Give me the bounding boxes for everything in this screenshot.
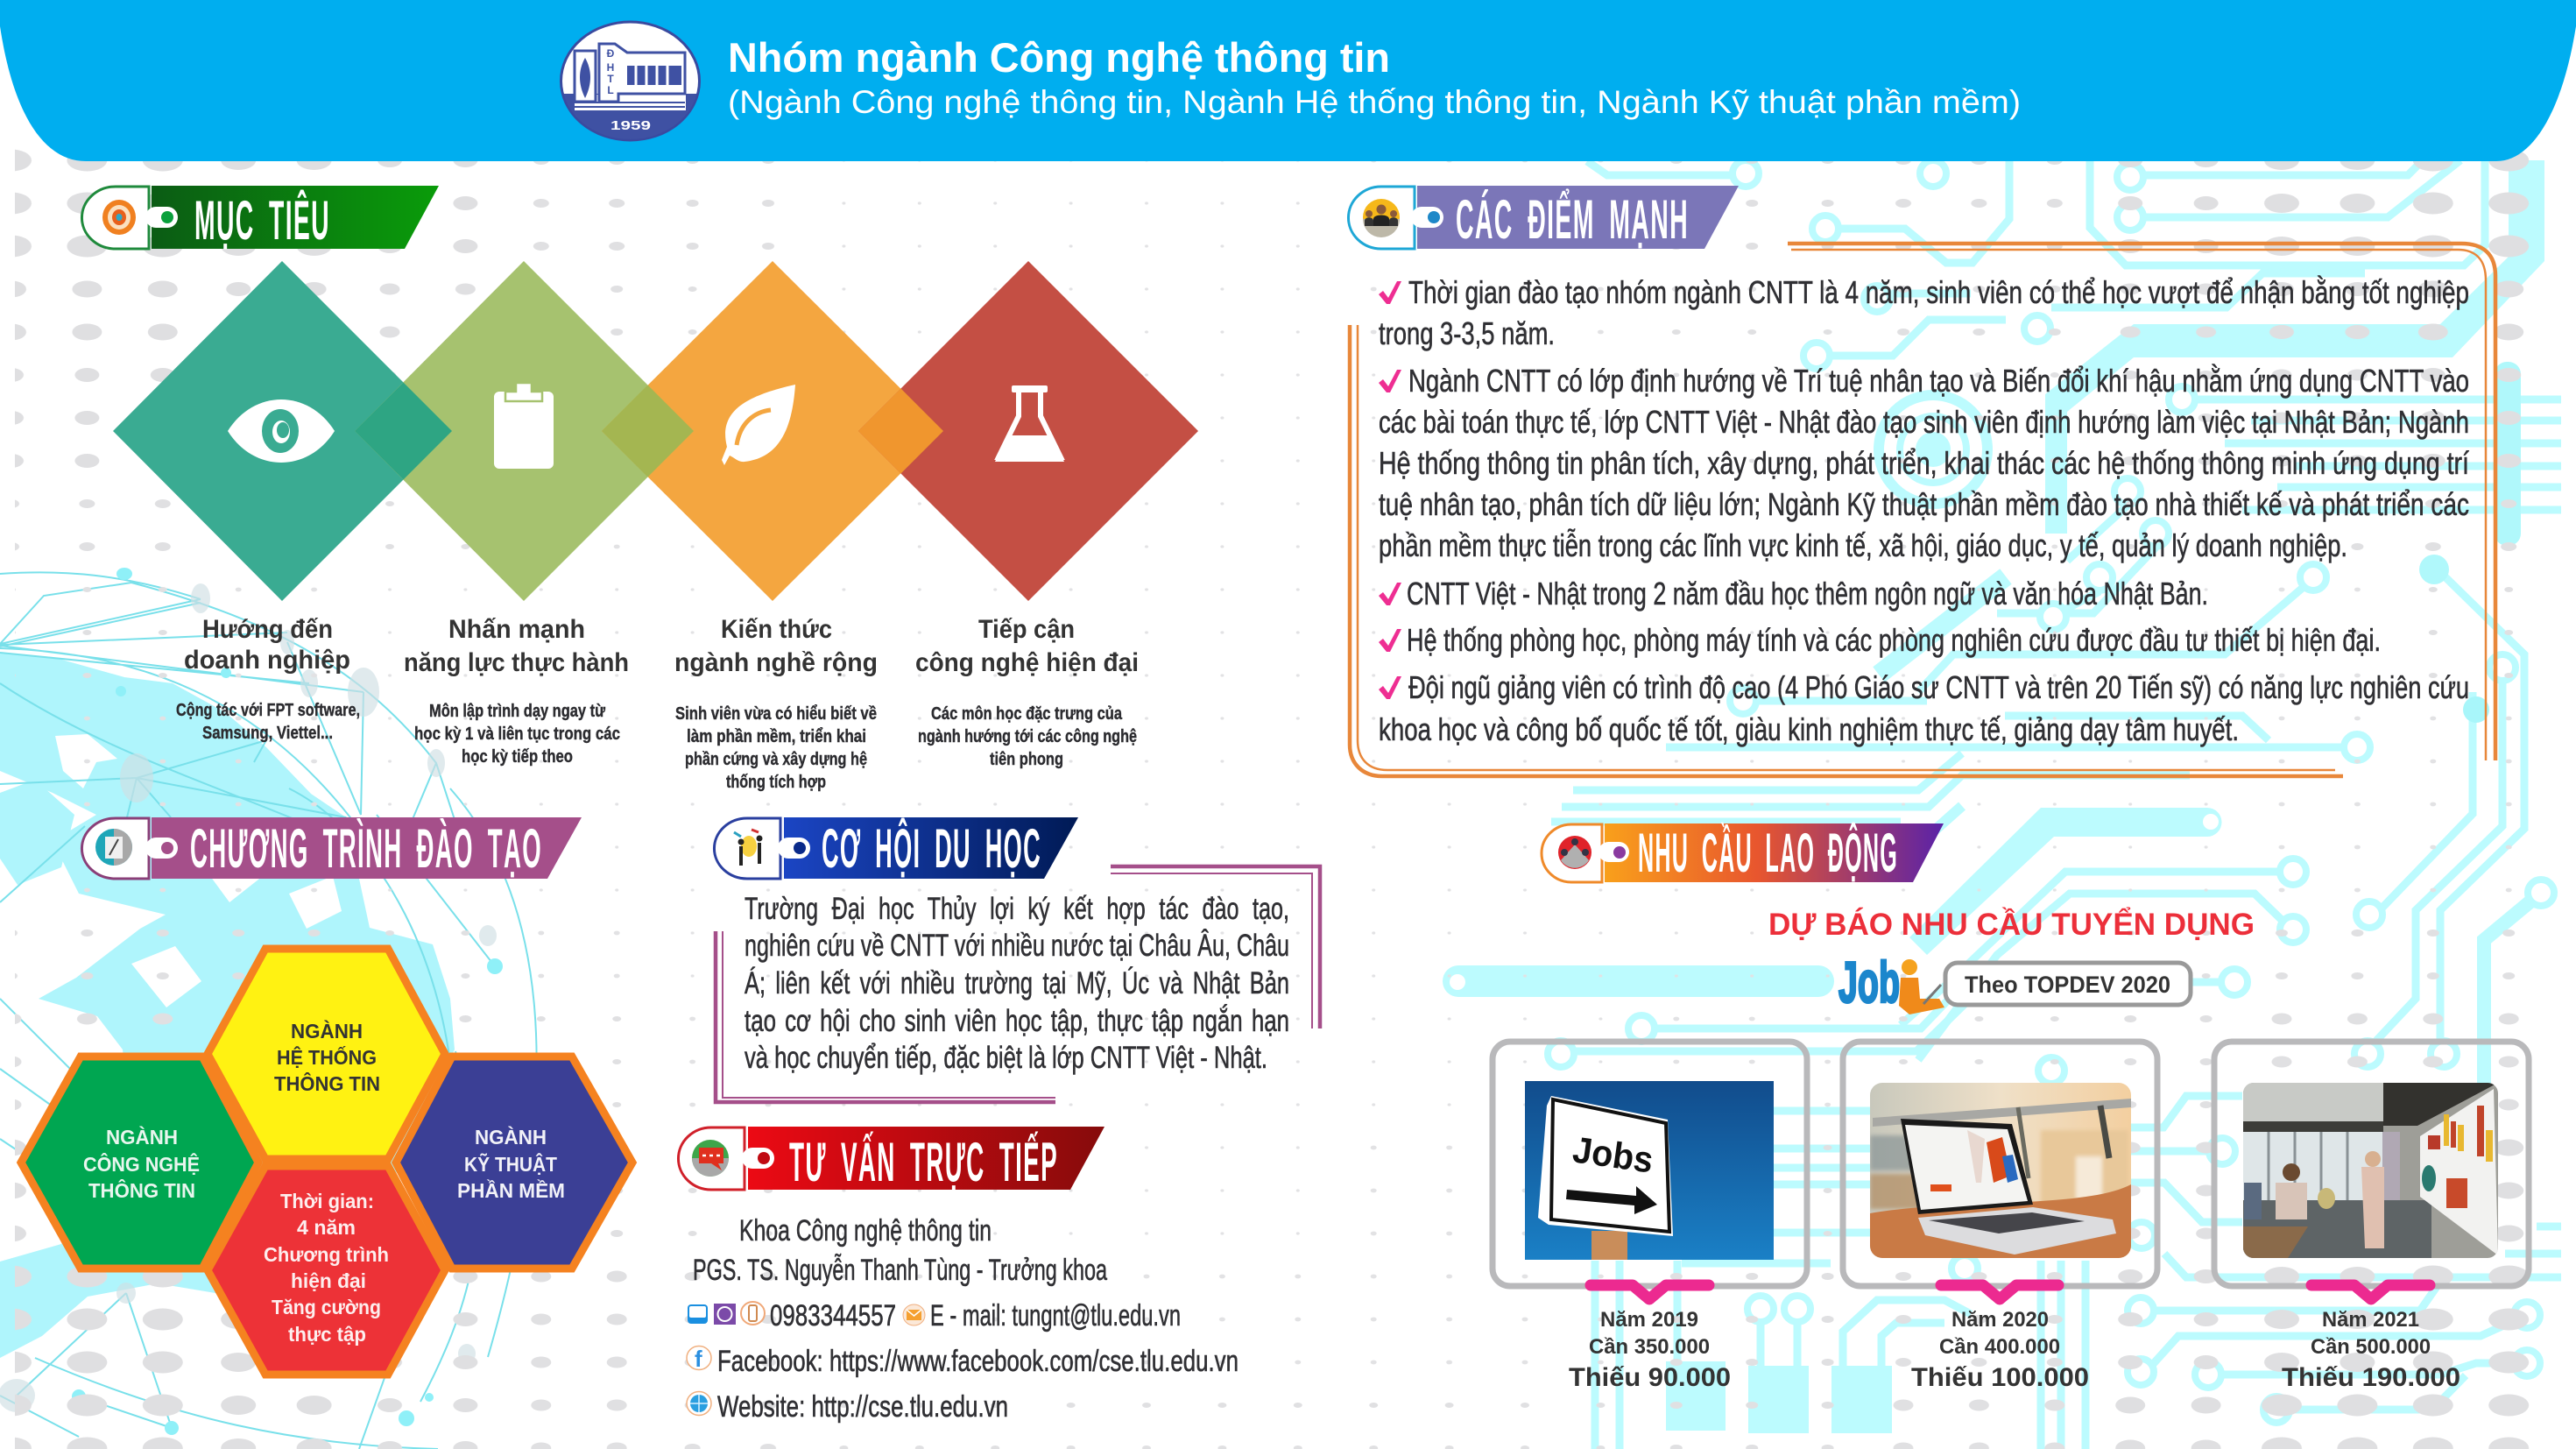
panel: strengths list with frame: CNTT Việt - Nhật trong 2 năm đầu học thêm ngôn ngữ và văn hóa Nhật Bản. [1407,576,2208,611]
hexagon: Nganh Ky thuat phan mem: PHẦN MỀM [457,1178,565,1202]
goal 2 text [404,615,629,767]
check marks [1379,281,1401,699]
heading: Cac diem manh [1348,186,1739,251]
goal 4 text: ngành hướng tới các công nghệ [918,727,1137,746]
hexagon: Nganh Cong nghe thong tin [21,1057,258,1269]
panel: study abroad text with frame: tạo cơ hội cho sinh viên học tập, thực tập ngắn hạn [745,1004,1289,1038]
panel: contact details: Khoa Công nghệ thông tin [739,1214,992,1248]
background: world map with network lines [0,568,537,1449]
panel: contact details: E - mail: tungnt@tlu.edu.vn [930,1299,1181,1332]
panel: study abroad text with frame [716,866,1320,1102]
icon: people and lightbulb [734,830,762,866]
hexagon: duration and curriculum: Tăng cường [272,1296,381,1318]
photo: Jobs sign: Jobs [1570,1128,1655,1181]
callout: 2020 figures: Năm 2020 [1951,1308,2049,1332]
text: NHU CẦU LAO ĐỘNG [1638,822,1898,884]
panel: study abroad text with frame: nghiên cứu về CNTT với nhiều nước tại Châu Âu, Châu [745,929,1289,963]
hexagon: Nganh Cong nghe thong tin: NGÀNH [106,1125,178,1149]
card: year 2021 [2214,1042,2529,1286]
icon: mail [903,1304,925,1325]
diamond row: four goals [113,261,1198,601]
goal 3 text: Kiến thức [721,615,832,644]
icon: team [1363,199,1400,237]
goal 3 text: phần cứng và xây dựng hệ [685,750,867,769]
card: year 2020 [1843,1042,2157,1286]
callout: 2020 figures: Cần 400.000 [1939,1335,2060,1359]
callout: 2019 figures: Năm 2019 [1600,1308,1698,1332]
background: circuit board traces [1443,160,2561,1449]
callout: 2020 figures [1911,1285,2089,1392]
icon: eye [228,399,335,463]
chart heading: recruitment forecast: DỰ BÁO NHU CẦU TUYỂN DỤNG [1768,907,2255,942]
heading: Tu van truc tiep: TƯ VẤN TRỰC TIẾP [789,1131,1058,1193]
goal 3 text: làm phần mềm, triển khai [687,727,866,746]
hexagon: duration and curriculum: thực tập [288,1323,366,1346]
panel: contact details: 0983344557 [770,1299,896,1332]
icon: leaf [722,385,795,465]
goal 4 text: Tiếp cận [978,615,1075,644]
logo: Thuy Loi University: L [607,84,614,96]
panel: study abroad text with frame: và học chuyển tiếp, đặc biệt là lớp CNTT Việt - Nhật. [745,1041,1267,1075]
photo: office presentation [2243,1083,2498,1258]
icon: workers [1558,836,1591,869]
goal 1 text: Samsung, Viettel... [202,724,333,743]
heading: Cac diem manh: CÁC ĐIỂM MẠNH [1456,188,1689,251]
icon: document [95,829,132,866]
icon: flask [995,385,1064,462]
icon: viber [714,1304,736,1325]
callout: 2021 figures: Năm 2021 [2322,1308,2419,1332]
photo: laptop [1870,1083,2131,1258]
callout: 2021 figures: Thiếu 190.000 [2282,1363,2460,1392]
panel: strengths list with frame: trong 3-3,5 năm. [1379,315,1555,351]
panel: study abroad text with frame: Trường Đại học Thủy lợi ký kết hợp tác đào tạo, [745,892,1289,926]
goal 2 text: học kỳ 1 và liên tục trong các [414,724,620,744]
hexagon: Nganh He thong thong tin [208,949,445,1159]
icon: clipboard [494,383,554,469]
goal 2 text: Môn lập trình dạy ngay từ [429,702,605,721]
heading: Co hoi du hoc [714,817,1078,880]
goal 1 text: Cộng tác với FPT software, [176,701,360,720]
logo: Thuy Loi University: H [607,61,614,74]
goal 4 text: công nghệ hiện đại [915,648,1139,677]
hexagon: Nganh Cong nghe thong tin: CÔNG NGHỆ [83,1152,200,1176]
goal 2 text: năng lực thực hành [404,648,629,677]
text: CHƯƠNG TRÌNH ĐÀO TẠO [190,818,542,880]
card: year 2019 [1493,1042,1807,1286]
hexagon: Nganh He thong thong tin: THÔNG TIN [274,1071,380,1095]
subtitle: (Ngành Công nghệ thông tin, Ngành Hệ thống thông tin, Ngành Kỹ thuật phần mềm) [728,84,2021,120]
goal 2 text: Nhấn mạnh [448,615,585,644]
photo: Jobs sign [1525,1081,1774,1260]
callout: 2019 figures: Cần 350.000 [1589,1335,1710,1359]
header band [0,0,2576,161]
goal 1 text [176,615,360,743]
goal 1 text: Hướng đến [202,615,333,644]
callout: 2019 figures [1569,1285,1731,1392]
hexagon: Nganh He thong thong tin: NGÀNH [291,1019,363,1043]
callout: 2020 figures: Thiếu 100.000 [1911,1363,2089,1392]
callout: 2021 figures [2282,1285,2460,1392]
hexagon: Nganh Cong nghe thong tin: THÔNG TIN [88,1178,195,1202]
heading: Tu van truc tiep [678,1127,1105,1193]
goal 4 text [915,615,1139,769]
goal 3 text: thống tích hợp [726,773,826,792]
icon: facebook [687,1346,711,1372]
hexagon cluster: programs [21,949,632,1375]
panel: strengths list with frame [1350,244,2495,776]
panel: contact details: Facebook: https://www.facebook.com/cse.tlu.edu.vn [717,1345,1239,1378]
hexagon: duration and curriculum: 4 năm [297,1216,356,1239]
goal 2 text: học kỳ tiếp theo [462,747,573,767]
hexagon: duration and curriculum: Chương trình [264,1243,389,1266]
logo: Thuy Loi University: T [607,73,614,85]
title: Nhóm ngành Công nghệ thông tin [728,34,1390,81]
callout: 2021 figures: Cần 500.000 [2311,1335,2431,1359]
hexagon: duration and curriculum: hiện đại [291,1269,366,1292]
hexagon: duration and curriculum [208,1166,445,1375]
hexagon: Nganh Ky thuat phan mem: KỸ THUẬT [464,1152,557,1176]
panel: study abroad text with frame: Á; liên kết với nhiều trường tại Mỹ, Úc và Nhật Bản [745,966,1289,1000]
icon: globe [687,1391,711,1416]
goal 4 text: tiên phong [990,750,1063,769]
heading: Co hoi du hoc: CƠ HỘI DU HỌC [822,817,1041,880]
goal 4 text: Các môn học đặc trưng của [931,704,1123,724]
heading: Nhu cau lao dong [1542,822,1944,884]
heading: Muc tieu: MỤC TIÊU [194,189,330,251]
hexagon: Nganh Ky thuat phan mem: NGÀNH [475,1125,547,1149]
logo: Thuy Loi University: 1959 [610,118,651,133]
hexagon: duration and curriculum: Thời gian: [280,1190,374,1212]
hexagon: Nganh Ky thuat phan mem [396,1057,632,1269]
logo: Thuy Loi University: Đ [607,47,615,60]
panel: contact details: PGS. TS. Nguyễn Thanh Tùng - Trưởng khoa [693,1254,1107,1287]
source badge [1945,963,2191,1005]
panel: contact details: Website: http://cse.tlu.edu.vn [717,1390,1008,1424]
hexagon: Nganh He thong thong tin: HỆ THỐNG [277,1045,377,1069]
heading: Muc tieu [81,186,439,251]
icon: facebook: f [695,1346,702,1372]
icon: phone [741,1302,765,1325]
icon: chat bubble [692,1140,729,1177]
goal 3 text: ngành nghề rộng [674,648,878,677]
panel: strengths list with frame: khoa học và công bố quốc tế tốt, giàu kinh nghiệm thực tế, giảng dạy tâm huyết. [1379,711,2239,747]
goal 3 text: Sinh viên vừa có hiểu biết về [675,704,877,724]
callout: 2019 figures: Thiếu 90.000 [1569,1363,1731,1392]
goal 3 text [674,615,878,792]
heading: Chuong trinh dao tao [81,817,582,880]
logo: Thuy Loi University [561,22,701,142]
goal 1 text: doanh nghiệp [184,646,350,675]
icon: Job logo with person: Job [1838,950,1900,1014]
panel: contact details [687,1214,1239,1424]
icon: target [102,200,136,235]
icon: zalo [688,1304,708,1324]
source badge: Theo TOPDEV 2020 [1965,972,2170,998]
